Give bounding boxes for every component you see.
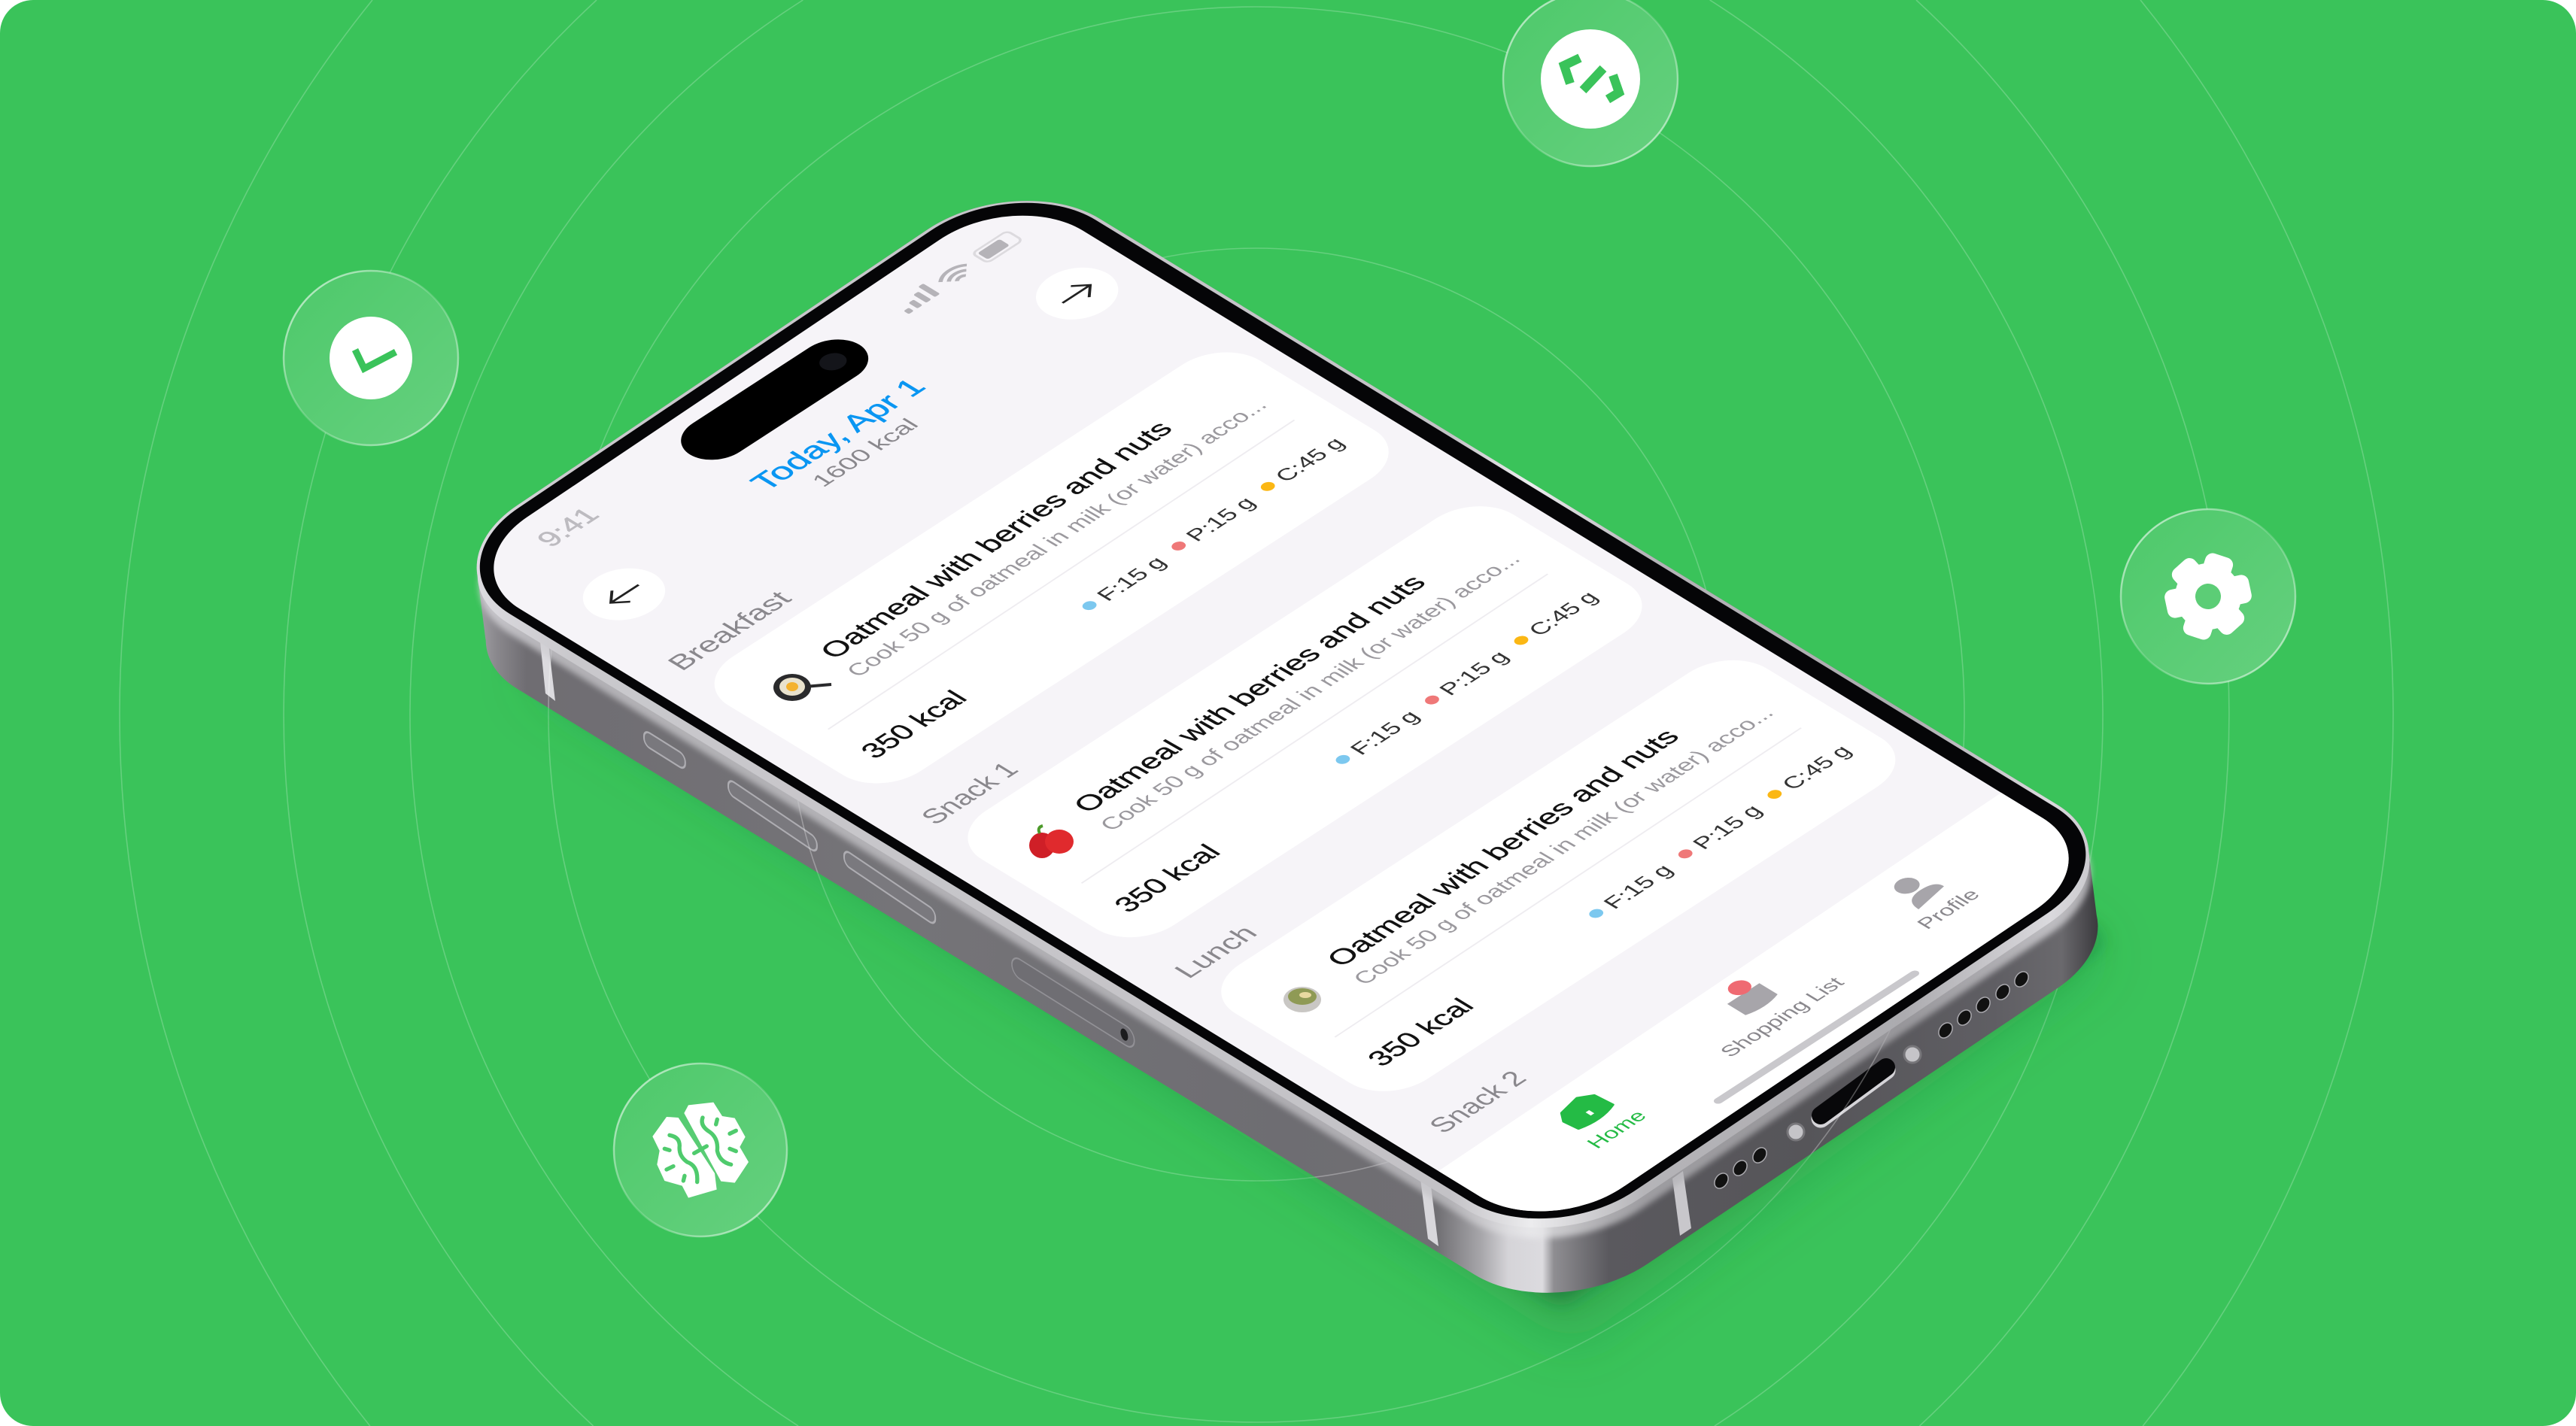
label: snack 2: Snack 2 [1423,1066,1533,1137]
tab: profile: Profile [1912,886,1985,932]
antenna band: left [539,634,555,701]
label: breakfast: Breakfast [661,587,798,675]
macros: C:45 g [1776,742,1857,793]
tab: shopping list: Shopping List [1715,974,1848,1060]
meal description: Cook 50 g of oatmeal in milk (or water) acco... [840,396,1272,680]
phone glass group [432,172,2134,1249]
macros: F:15 g [1092,554,1171,605]
calories: 350 kcal [1362,994,1481,1071]
macros: F:15 g [1345,707,1425,758]
phone rim [470,181,2107,1294]
bubble: check [284,271,458,445]
macros: C:45 g [1270,434,1350,485]
meal description: Cook 50 g of oatmeal in milk (or water) acco... [1094,549,1526,834]
card: lunch [1198,646,1918,1106]
home indicator [1712,969,1921,1105]
speaker holes right [1936,969,2031,1041]
forward button [1019,257,1135,330]
macros: P:15 g [1434,648,1514,699]
daily calories: 1600 kcal [806,414,924,490]
rings over phone side [548,257,1891,1178]
card: breakfast [692,338,1411,797]
tab: shopping list [1672,948,1848,1060]
icon: apple [1029,826,1074,858]
volume down button [844,849,935,926]
tab: home [1546,1085,1651,1151]
bubble: code [1503,0,1678,174]
meal description: Cook 50 g of oatmeal in milk (or water) acco... [1347,703,1779,988]
bubble: brain [614,1063,787,1236]
calories: 350 kcal [855,687,974,763]
card: snack 1 [945,492,1665,951]
date heading: Today, Apr 1 [744,374,933,496]
meal title: Oatmeal with berries and nuts [1320,725,1686,971]
macros: F:15 g [1598,861,1678,912]
macros [1578,742,1860,924]
volume up button [728,778,817,854]
signal icon [892,284,940,314]
bubble: gear [2121,509,2295,684]
screen background [452,189,2110,1238]
calories: 350 kcal [1108,840,1227,917]
label: snack 1: Snack 1 [915,758,1025,829]
macros: P:15 g [1687,802,1768,853]
phone body side [470,181,2107,1294]
sim tray [1012,954,1135,1051]
macros: C:45 g [1523,588,1603,639]
meal title: Oatmeal with berries and nuts [814,417,1180,663]
macros: P:15 g [1180,493,1261,545]
macros [1326,588,1606,769]
screw left [1788,1124,1804,1140]
dynamic island [667,330,882,469]
antenna band: bottom left [1420,1179,1438,1246]
tab bar background [1438,793,2110,1238]
usb-c port [1821,1067,1886,1118]
icon: soup bowl [1283,987,1321,1012]
icon: frying pan [773,674,831,701]
status time: 9:41 [530,503,606,551]
bezel [432,172,2134,1249]
phone rim soft bevel [475,572,2095,1241]
back button [566,558,682,631]
label: lunch: Lunch [1168,921,1264,983]
tab: home: Home [1581,1107,1651,1151]
phone [475,201,2111,1347]
phone screen content [485,213,2089,1209]
wifi icon [936,262,974,287]
battery icon [972,231,1022,263]
screw right [1904,1046,1921,1063]
phone shadow [512,286,2107,1346]
meal title: Oatmeal with berries and nuts [1067,572,1432,817]
antenna band: bottom right [1672,1171,1691,1236]
speaker holes left [1712,1145,1769,1191]
action button [644,730,685,770]
tab: profile [1873,862,1985,932]
macros [1072,434,1353,615]
